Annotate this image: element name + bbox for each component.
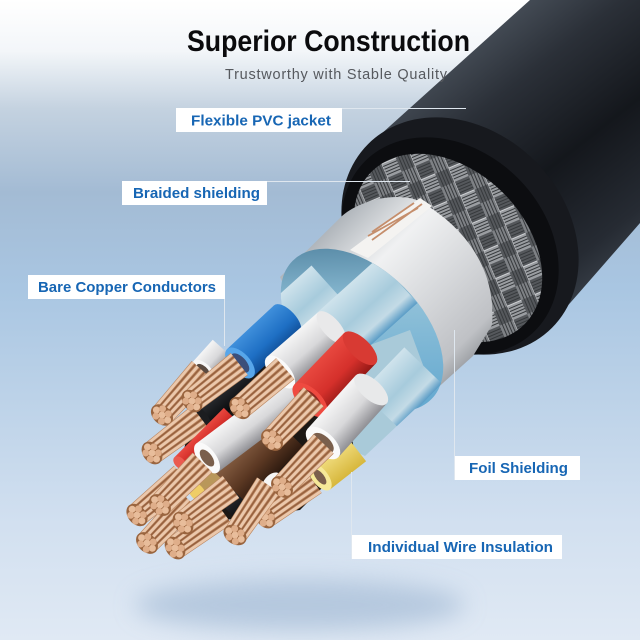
- slit with drain wire: [350, 198, 432, 258]
- callout: Bare Copper Conductors: Bare Copper Conductors: [38, 279, 216, 296]
- lower foil tube: [330, 330, 433, 456]
- callout: Individual Wire Insulation: Individual Wire Insulation: [368, 539, 553, 556]
- wire: blue: [176, 299, 306, 418]
- wire: tan: [131, 463, 228, 559]
- dark backing behind wires: [180, 330, 355, 520]
- wire: white long: [121, 376, 308, 532]
- callout: Braided shielding: Braided shielding: [133, 185, 260, 202]
- foil interior: [280, 248, 444, 456]
- wire: white two: [224, 306, 351, 424]
- cable outer jacket: [293, 0, 640, 403]
- wire: brown: [167, 413, 303, 540]
- wire: small white with strand: [218, 469, 286, 550]
- callout: Bare Copper Conductors: [28, 275, 225, 346]
- wire: lower black: [159, 457, 283, 565]
- callout: Foil Shielding: [454, 330, 580, 480]
- wire: black: [136, 361, 263, 470]
- title: Superior Construction: [187, 25, 470, 58]
- callout: Foil Shielding: Foil Shielding: [469, 460, 568, 477]
- wire: white right: [266, 368, 393, 503]
- subtitle: Trustworthy with Stable Quality: [225, 67, 448, 83]
- callout: Flexible PVC jacket: [176, 108, 466, 132]
- wire: yellow: [249, 436, 366, 534]
- wire: back white: [146, 340, 232, 431]
- callout: Individual Wire Insulation: [351, 472, 562, 559]
- wire: red: [256, 326, 383, 456]
- pale foil tubes: [280, 263, 441, 426]
- callout: Braided shielding: [122, 181, 410, 205]
- wires: [121, 299, 393, 565]
- cable shadow: [135, 579, 465, 631]
- callout: Flexible PVC jacket: Flexible PVC jacket: [191, 112, 331, 130]
- foil shield tube: [280, 197, 492, 392]
- wire: thin red: [171, 408, 235, 472]
- wire: small yellow: [243, 480, 276, 508]
- braided shielding: [316, 116, 580, 380]
